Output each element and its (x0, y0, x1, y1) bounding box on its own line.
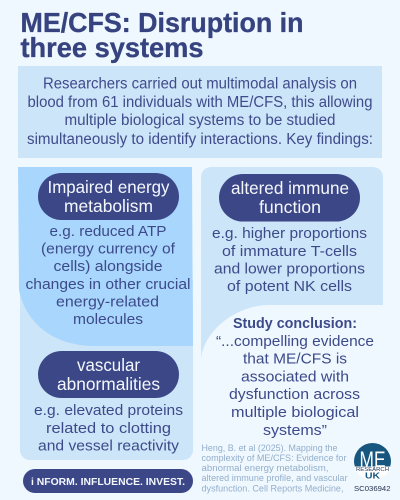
pill heading: vascular abnormalities (38, 351, 179, 398)
text: vascular detail (34, 402, 183, 454)
text: energy metabolism detail: (energy currency of (41, 240, 176, 258)
citation: altered immune profile, and vascular (202, 473, 348, 483)
text: study conclusion: associated with (241, 368, 349, 386)
text: study conclusion: dysfunction across (229, 386, 360, 403)
logo: ME Research UK: RESEARCH (356, 467, 389, 473)
text: vascular detail: related to clotting (46, 420, 171, 437)
charity number: SC036942 (354, 484, 390, 493)
text: immune detail: of immature T-cells (222, 243, 357, 260)
citation: Heng, B. et al (2025). Mapping the (202, 443, 338, 453)
text: study conclusion: multiple biological (231, 404, 359, 421)
title: ME/CFS: Disruption in (20, 7, 304, 38)
panel: impaired energy metabolism (26, 173, 190, 328)
text: energy metabolism detail: changes in other crucial (26, 276, 190, 293)
citation (202, 443, 348, 494)
title (20, 7, 304, 63)
text: immune detail: e.g. higher proportions (212, 225, 367, 242)
text: study conclusion: Study conclusion: (233, 315, 357, 332)
pill heading: altered immune function: function (259, 197, 321, 217)
citation: abnormal energy metabolism, (202, 463, 328, 473)
text: energy metabolism detail: e.g. reduced ATP (50, 223, 166, 240)
text: study conclusion (216, 315, 374, 439)
text: vascular detail: e.g. elevated proteins (34, 402, 183, 419)
logo: ME Research UK: ME (360, 447, 386, 472)
text: study conclusion: “...compelling evidence (216, 333, 374, 350)
text: study conclusion: systems” (263, 422, 327, 439)
pill heading: altered immune function: altered immune (231, 178, 349, 198)
text: energy metabolism detail (26, 223, 190, 328)
text: energy metabolism detail: energy-related (56, 294, 159, 310)
citation: complexity of ME/CFS: Evidence for (202, 453, 347, 463)
pill heading: altered immune function (219, 174, 360, 222)
footer tagline pill: i NFORM. INFLUENCE. INVEST. (31, 476, 185, 488)
text: immune detail: and lower proportions (214, 260, 365, 278)
pill heading: vascular abnormalities: abnormalities (57, 374, 160, 394)
panel: introduction: multiple biological systems to be studied (64, 112, 336, 129)
panel: introduction: simultaneously to identify interactions. Key findings: (27, 131, 373, 148)
text: energy metabolism detail: cells) alongside (54, 258, 162, 275)
logo: ME Research UK (354, 443, 391, 480)
citation: dysfunction. Cell Reports Medicine, (202, 484, 344, 494)
pill heading: impaired energy metabolism: Impaired energy (48, 177, 170, 197)
pill heading: vascular abnormalities: vascular (77, 355, 140, 375)
panel: vascular abnormalities (34, 351, 183, 454)
panel: introduction: blood from 61 individuals with ME/CFS, this allowing (28, 94, 372, 111)
text: vascular detail: and vessel reactivity (38, 438, 180, 454)
text: energy metabolism detail: molecules (73, 311, 143, 328)
panel: introduction (18, 66, 382, 158)
pill heading: impaired energy metabolism: metabolism (64, 196, 153, 216)
text: immune detail: of potent NK cells (227, 278, 352, 295)
panel: altered immune function (201, 167, 383, 362)
text: study conclusion: that ME/CFS is (243, 350, 347, 368)
footer tagline pill (23, 469, 193, 493)
logo: ME Research UK: UK (365, 470, 381, 480)
pill heading: impaired energy metabolism (38, 173, 179, 220)
title: three systems (20, 32, 204, 63)
text: immune detail (212, 225, 367, 295)
panel: left column background (18, 167, 193, 460)
panel: introduction: Researchers carried out multimodal analysis on (43, 76, 357, 92)
